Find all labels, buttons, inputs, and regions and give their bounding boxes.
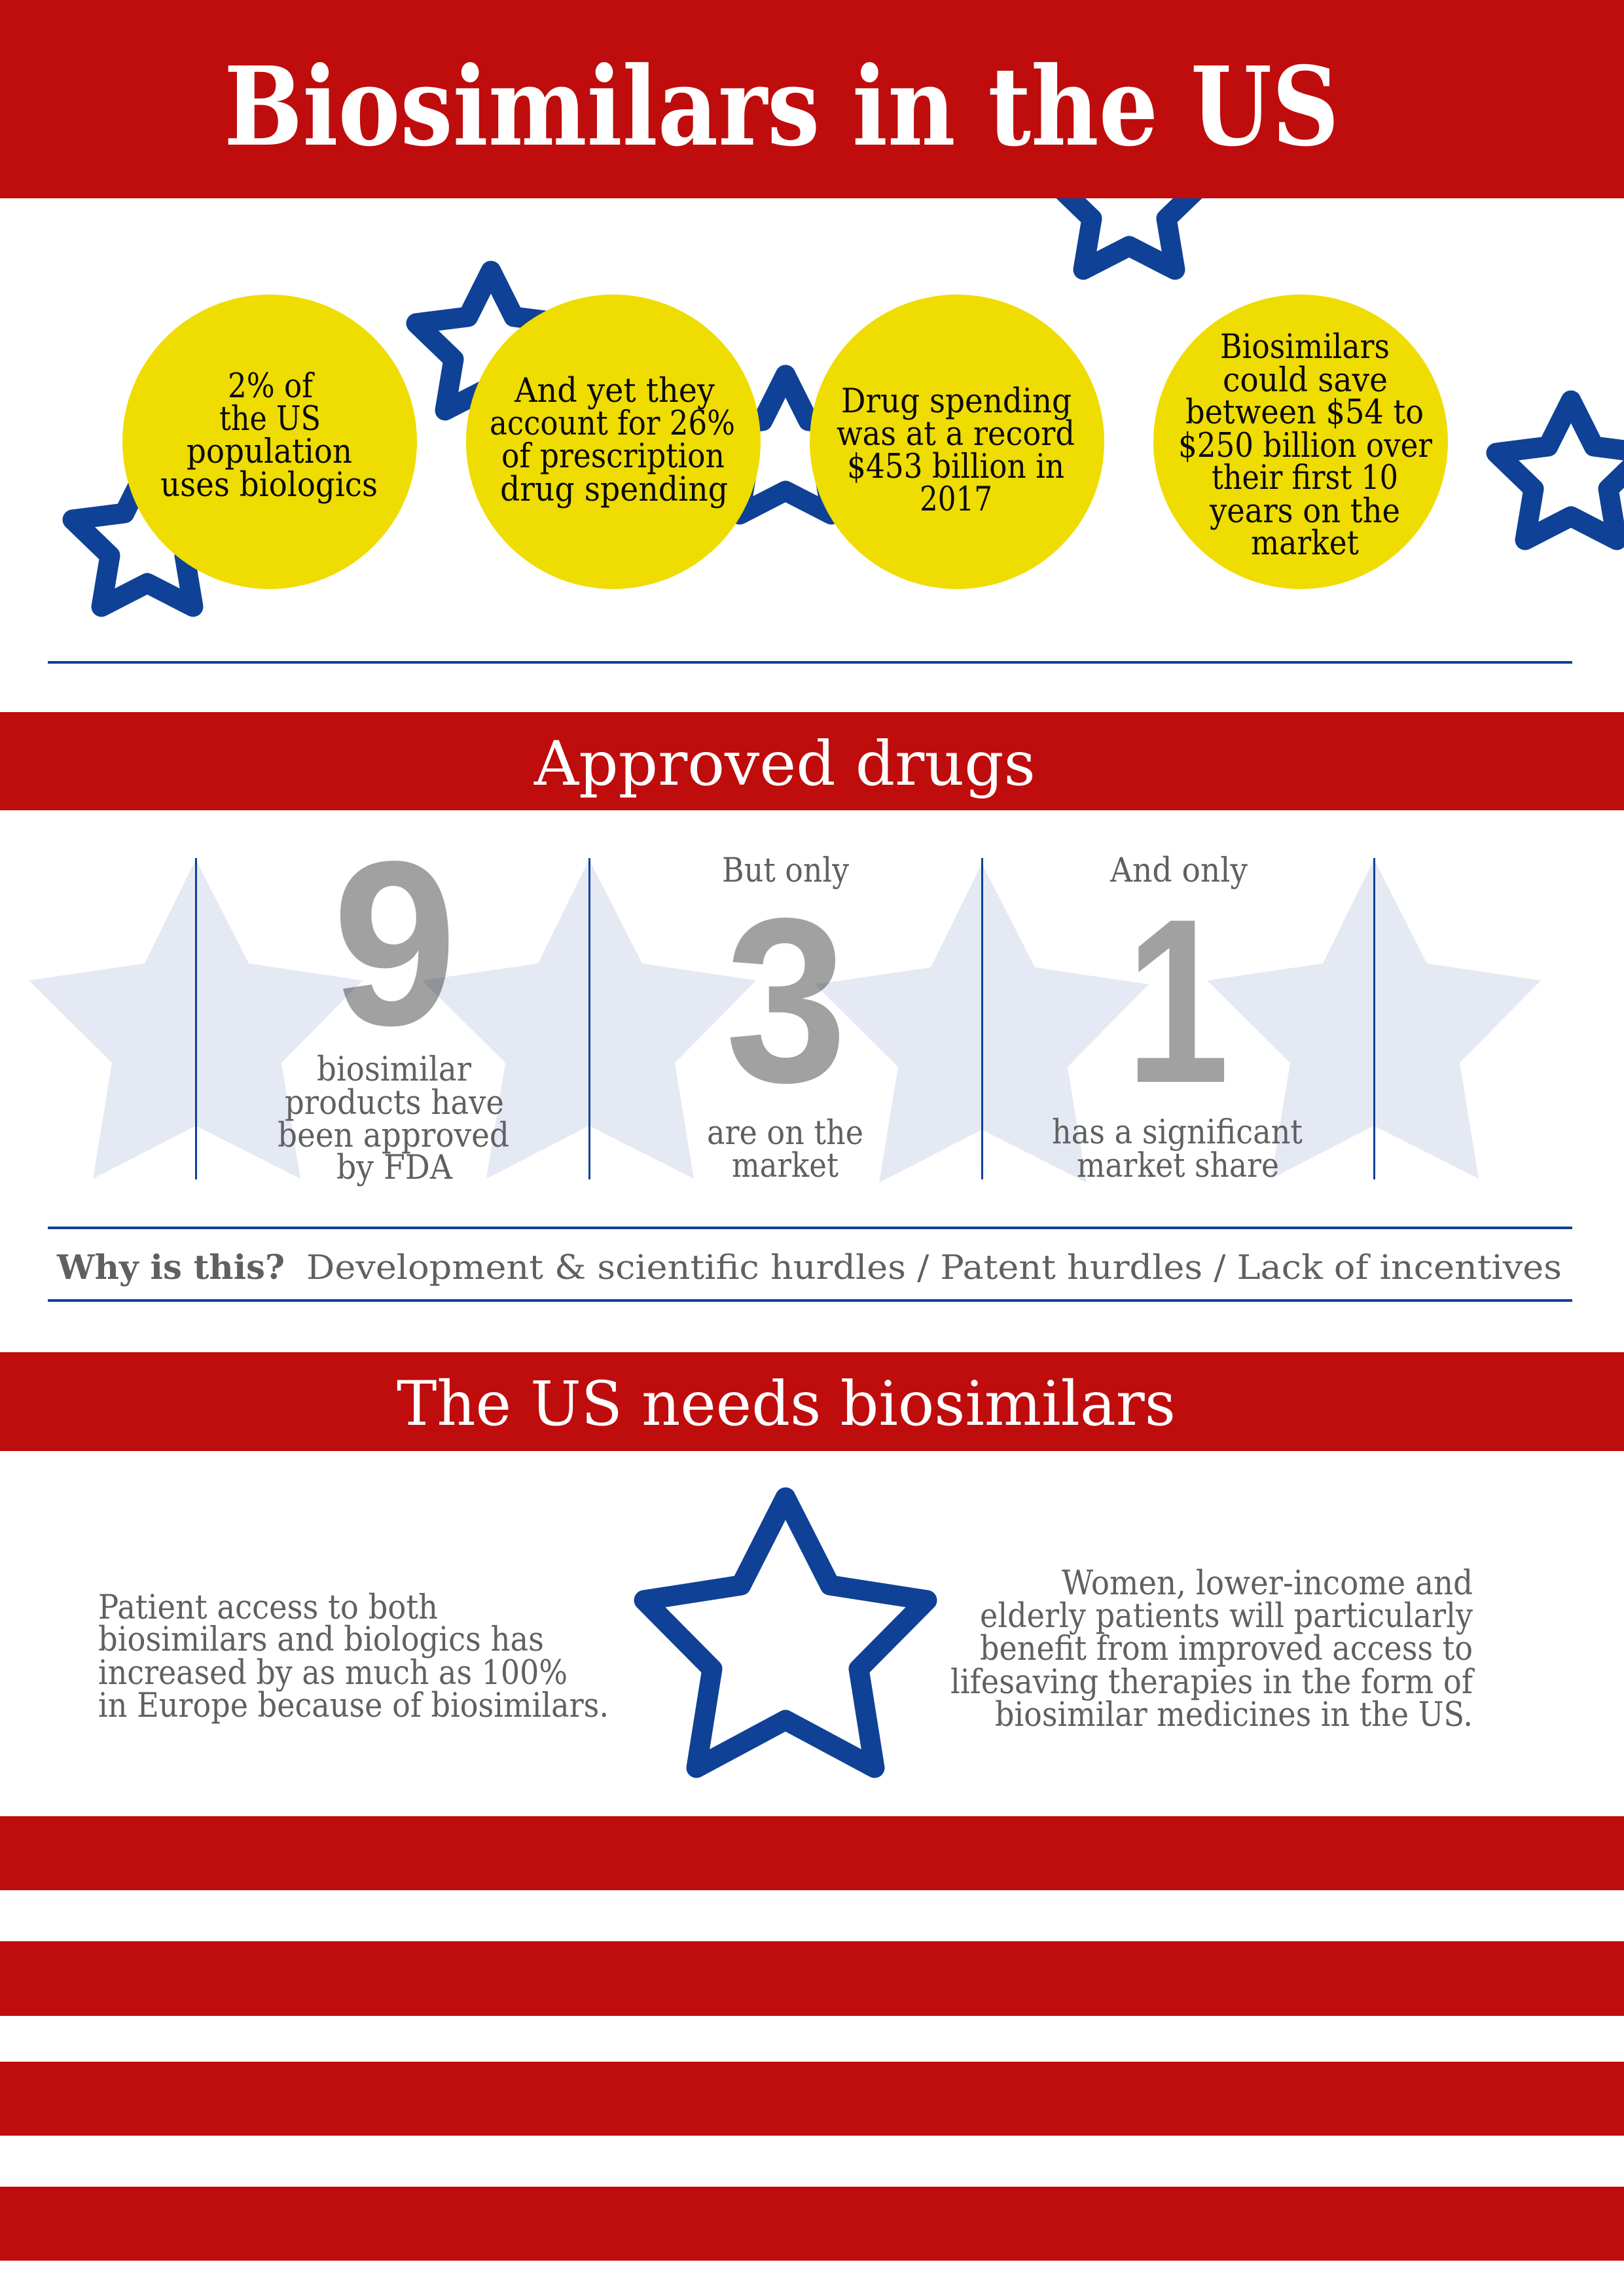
callout: why is this	[48, 1227, 1572, 1302]
icon: star top right	[1055, 130, 1204, 270]
callout: why is this: Why is this?	[56, 1248, 285, 1287]
circle: record spending fact: $453 billion in	[847, 448, 1064, 486]
circle: savings fact: between $54 to	[1185, 393, 1424, 432]
circle: population fact: the US	[219, 400, 321, 439]
title banner	[0, 0, 1624, 198]
heading: approved drugs: Approved drugs	[533, 728, 1036, 800]
stat: 9 approved: products have	[285, 1084, 504, 1122]
circle: spending share fact: And yet they	[514, 372, 715, 410]
circle: record spending fact: was at a record	[837, 415, 1075, 454]
icon: star far right	[1496, 401, 1624, 540]
stat: 1 with market share: And only	[1110, 852, 1248, 890]
circle: savings fact: market	[1251, 524, 1359, 563]
heading: the US needs biosimilars	[0, 1352, 1624, 1451]
circle: savings fact	[1153, 295, 1448, 589]
title banner: Biosimilars in the US	[224, 43, 1339, 171]
heading: approved drugs	[0, 712, 1624, 810]
text: benefits for women, lower-income and elderly patients: biosimilar medicines in the US.	[995, 1696, 1473, 1734]
circle: savings fact: their first 10	[1212, 459, 1398, 497]
panel: key facts	[73, 130, 1624, 607]
circle: population fact: population	[187, 433, 352, 471]
icon: star centre	[711, 375, 860, 514]
text: benefits for women, lower-income and elderly patients: benefit from improved access to	[980, 1630, 1473, 1668]
text: patient access in Europe	[98, 1588, 609, 1725]
stat: 1 with market share: has a significant	[1052, 1113, 1303, 1152]
stat: 1 with market share: market share	[1077, 1147, 1279, 1185]
circle: record spending fact	[810, 295, 1104, 589]
text: benefits for women, lower-income and elderly patients	[950, 1564, 1475, 1734]
stat: 3 on the market: market	[732, 1147, 839, 1185]
stat: 9 approved: biosimilar	[317, 1050, 472, 1089]
stat: 3 on the market: are on the	[707, 1114, 863, 1153]
text: benefits for women, lower-income and elderly patients: lifesaving therapies in the form of	[950, 1663, 1475, 1702]
panel: approved drugs figures	[29, 812, 1541, 1187]
circle: record spending fact: Drug spending	[841, 382, 1072, 421]
stat: 3 on the market: But only	[722, 852, 849, 890]
circle: record spending fact: 2017	[920, 480, 992, 519]
text: patient access in Europe: increased by as much as 100%	[98, 1654, 568, 1693]
circle: population fact: uses biologics	[160, 466, 378, 505]
circle: population fact	[122, 295, 417, 589]
circle: savings fact: could save	[1223, 361, 1388, 400]
text: patient access in Europe: Patient access to both	[98, 1588, 438, 1627]
circle: population fact: 2% of	[228, 367, 315, 406]
stat: 9 approved	[278, 812, 509, 1187]
text: benefits for women, lower-income and elderly patients: elderly patients will particularly	[980, 1597, 1473, 1636]
heading: the US needs biosimilars: The US needs biosimilars	[397, 1369, 1176, 1440]
footer stripes	[0, 1816, 1624, 2261]
circle: savings fact: $250 billion over	[1178, 427, 1433, 465]
circle: spending share fact: drug spending	[500, 471, 728, 509]
stat: 3 on the market: 3	[725, 869, 847, 1131]
circle: savings fact: Biosimilars	[1220, 328, 1390, 367]
text: patient access in Europe: biosimilars and biologics has	[98, 1621, 544, 1659]
callout: why is this: Development & scientific hurdles / Patent hurdles / Lack of incentives	[306, 1249, 1562, 1287]
stat: 9 approved: by FDA	[336, 1149, 453, 1187]
circle: savings fact: years on the	[1209, 492, 1400, 531]
circle: spending share fact	[466, 295, 761, 589]
stat: 9 approved: been approved	[278, 1117, 509, 1155]
circle: spending share fact: of prescription	[501, 437, 725, 476]
text: benefits for women, lower-income and elderly patients: Women, lower-income and	[1062, 1564, 1473, 1603]
icon: star upper left	[416, 271, 566, 410]
icon: star lower left	[73, 467, 222, 607]
icon: large star	[644, 1498, 927, 1768]
text: patient access in Europe: in Europe because of biosimilars.	[98, 1687, 609, 1725]
stat: 1 with market share	[1052, 852, 1303, 1185]
background stars	[29, 859, 1541, 1183]
stat: 3 on the market	[707, 852, 863, 1185]
stat: 9 approved: 9	[333, 812, 457, 1074]
stat: 1 with market share: 1	[1126, 870, 1229, 1132]
circle: spending share fact: account for 26%	[490, 404, 735, 443]
